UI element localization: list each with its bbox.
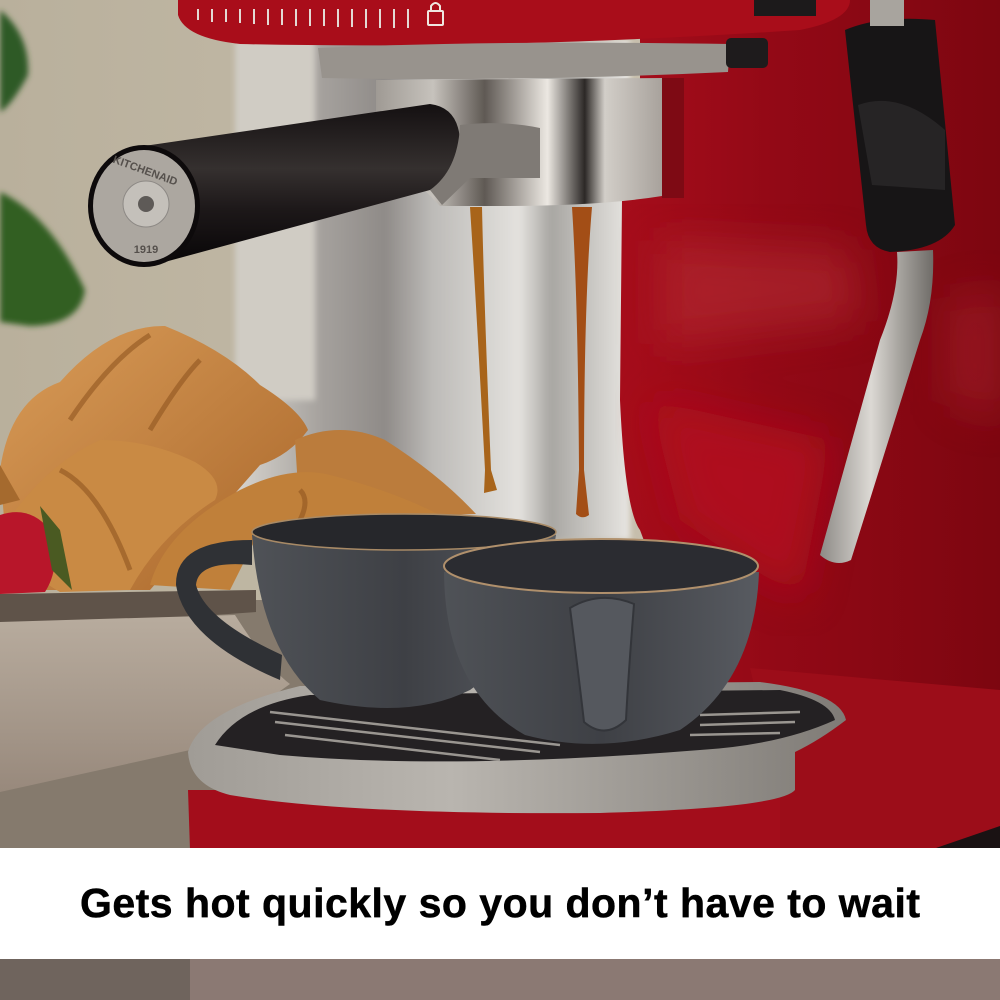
handle engraving: KITCHENAID [111,154,179,188]
back cup [176,514,556,708]
strawberry [0,506,72,594]
icon: lock [428,3,443,25]
red machine body [620,0,1000,690]
coffee streams [470,207,592,517]
base ledge [750,668,1000,850]
portafilter basket [376,78,662,206]
counter [0,600,640,850]
blurred window and steel background [235,40,630,540]
banner background [0,848,1000,960]
dial tick marks [198,9,408,28]
drip tray and base [188,682,846,850]
green leaves [0,10,85,326]
portafilter handle: 1919 [134,244,158,256]
group head collar [318,43,730,79]
portafilter handle [88,104,540,267]
handle end cap [88,145,200,267]
towel [0,615,290,792]
steam wand [820,0,955,563]
body reflections [650,240,1000,600]
head red top [178,0,850,45]
croissants [0,326,476,592]
plate [0,590,256,624]
bottom photo strip [0,959,1000,1000]
banner headline: Gets hot quickly so you don’t have to wait [80,880,920,926]
front cup [444,539,759,744]
